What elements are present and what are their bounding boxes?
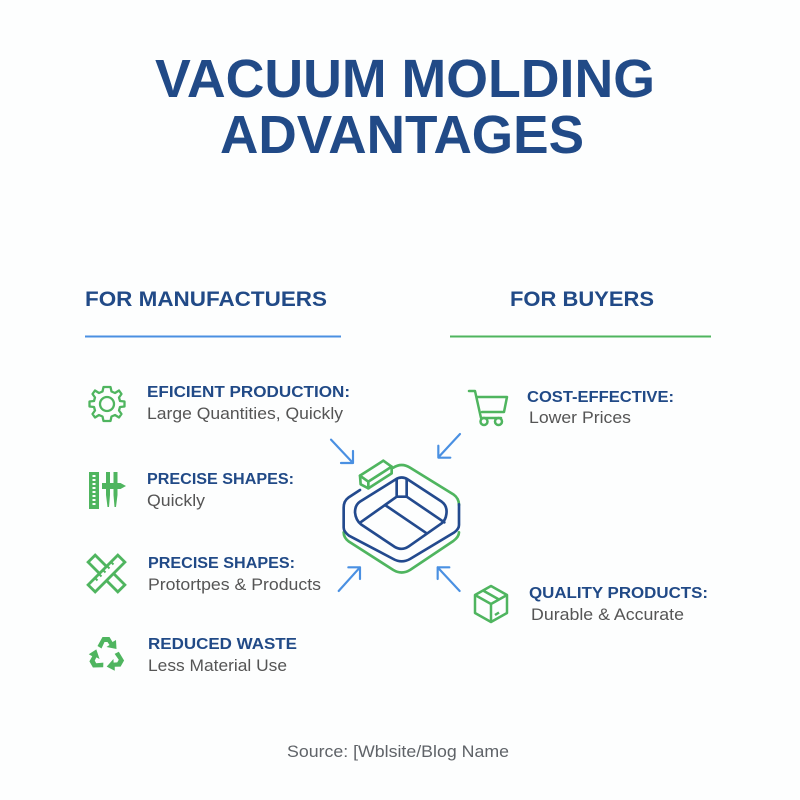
mold inner cavity [355,477,447,549]
text: precise shapes quickly: PRECISE SHAPES: [147,471,294,488]
title: VACUUM MOLDING [155,49,655,109]
text: precise shapes prototypes: Protortpes & Products [148,576,321,594]
icon: crossed rulers [88,555,125,592]
arrows [331,434,460,591]
item: precise shapes quickly [89,471,294,510]
mold body blue outline [344,490,459,561]
text: precise shapes prototypes: PRECISE SHAPES: [148,555,295,572]
text: reduced waste: Less Material Use [148,657,287,675]
text: efficient production: EFICIENT PRODUCTION: [147,384,350,401]
text: cost-effective: Lower Prices [529,409,631,427]
panel: for manufacturers [85,288,350,675]
item: reduced waste [86,636,297,675]
green block [360,461,392,488]
panel: for buyers [450,288,711,624]
center: mold icon with arrows [331,434,460,591]
text: reduced waste [148,636,297,675]
title [155,49,655,165]
text: cost-effective [527,389,674,427]
text: quality products [529,585,708,624]
text: quality products: Durable & Accurate [531,606,684,624]
icon: gear [90,387,124,421]
item: efficient production [90,384,350,423]
heading: for buyers: FOR BUYERS [510,288,654,311]
mold outer green outline [344,465,459,572]
text: precise shapes prototypes [148,555,321,594]
icon: shopping cart [469,391,507,425]
item: quality products [475,585,708,624]
item: precise shapes prototypes [88,555,321,594]
text: quality products: QUALITY PRODUCTS: [529,585,708,602]
text: precise shapes quickly [147,471,294,510]
text: reduced waste: REDUCED WASTE [148,636,297,653]
icon: ruler and caliper [89,472,126,509]
icon: recycle [86,637,127,673]
item: cost-effective [469,389,674,427]
source: Source: [Wblsite/Blog Name [287,743,509,761]
heading: for manufacturers: FOR MANUFACTUERS [85,288,327,311]
text: cost-effective: COST-EFFECTIVE: [527,389,674,406]
title: ADVANTAGES [220,105,584,165]
text: efficient production: Large Quantities, Quickly [147,405,344,423]
text: precise shapes quickly: Quickly [147,492,206,510]
icon: box [475,586,507,622]
text: efficient production [147,384,350,423]
